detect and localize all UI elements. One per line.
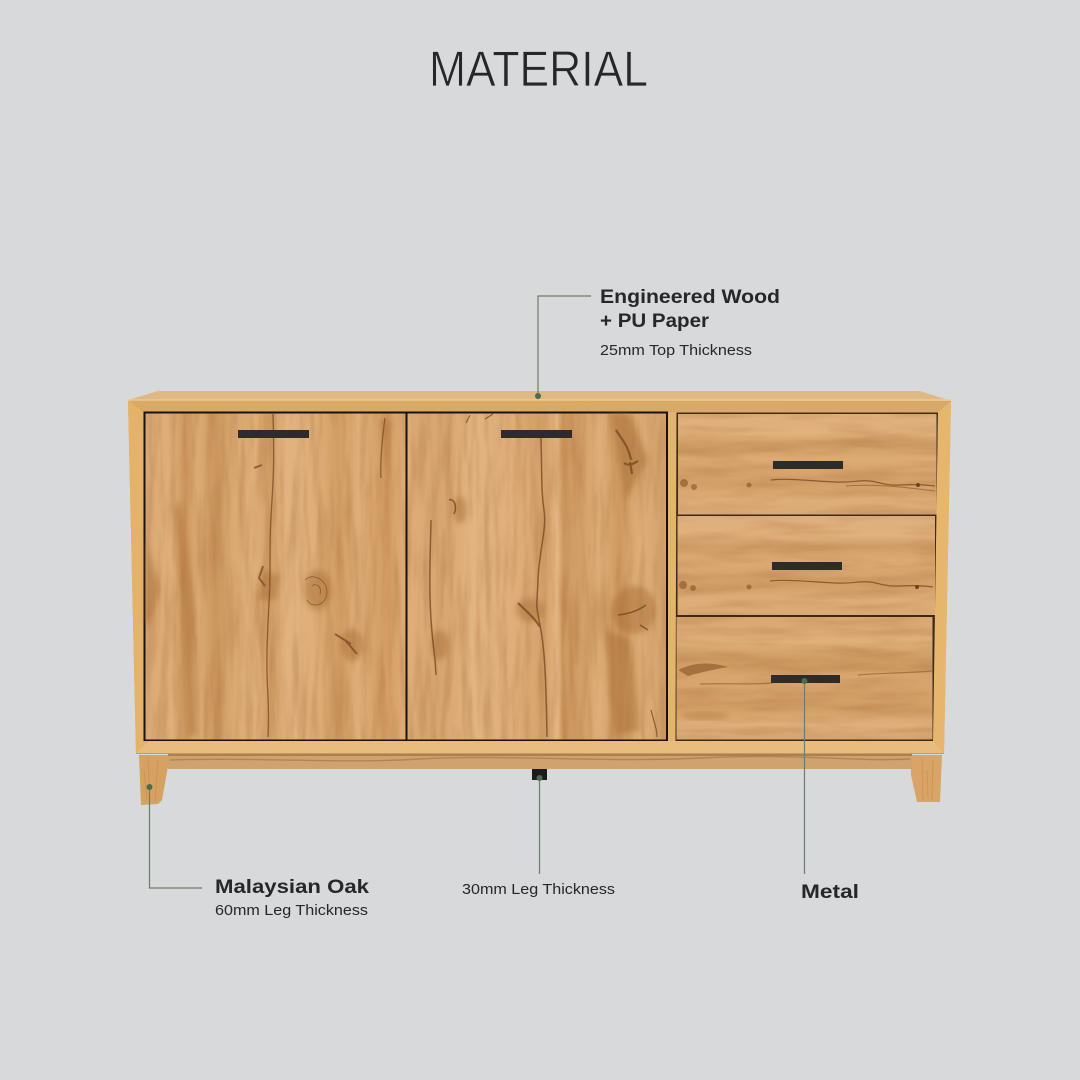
callout: center leg text: 30mm Leg Thickness bbox=[462, 882, 615, 898]
outer frame bbox=[128, 400, 951, 753]
bottom rail bbox=[136, 741, 944, 754]
left door bbox=[146, 414, 406, 740]
left leg bbox=[139, 755, 170, 805]
callout: malaysian oak leader bbox=[146, 784, 202, 888]
callout: center leg leader bbox=[536, 775, 542, 874]
callout: malaysian oak text: Malaysian Oak bbox=[215, 876, 369, 898]
door recess bbox=[144, 412, 668, 741]
divider rail bbox=[668, 412, 677, 741]
sideboard illustration bbox=[128, 391, 951, 805]
right leg bbox=[911, 755, 942, 802]
callout: malaysian oak text bbox=[215, 876, 369, 919]
top face bbox=[128, 391, 951, 401]
bottom drawer bbox=[676, 617, 932, 740]
title: MATERIAL bbox=[429, 41, 648, 97]
callout: engineered wood text: Engineered Wood bbox=[600, 286, 780, 308]
callout: metal text: Metal bbox=[801, 881, 859, 903]
drawers recess bbox=[676, 412, 938, 741]
callout: malaysian oak text: 60mm Leg Thickness bbox=[215, 903, 368, 919]
callout: engineered wood leader bbox=[535, 296, 591, 399]
callout: metal leader bbox=[802, 678, 808, 874]
callout: engineered wood text: 25mm Top Thickness bbox=[600, 343, 752, 359]
handles bbox=[238, 430, 843, 683]
callout: engineered wood text: + PU Paper bbox=[600, 310, 709, 332]
right door bbox=[408, 414, 666, 740]
callout: engineered wood text bbox=[600, 286, 780, 359]
middle drawer bbox=[678, 516, 935, 615]
apron bbox=[168, 754, 912, 769]
right frame edge beside drawers bbox=[933, 412, 940, 741]
top drawer bbox=[678, 414, 936, 514]
center leg bbox=[532, 769, 547, 780]
